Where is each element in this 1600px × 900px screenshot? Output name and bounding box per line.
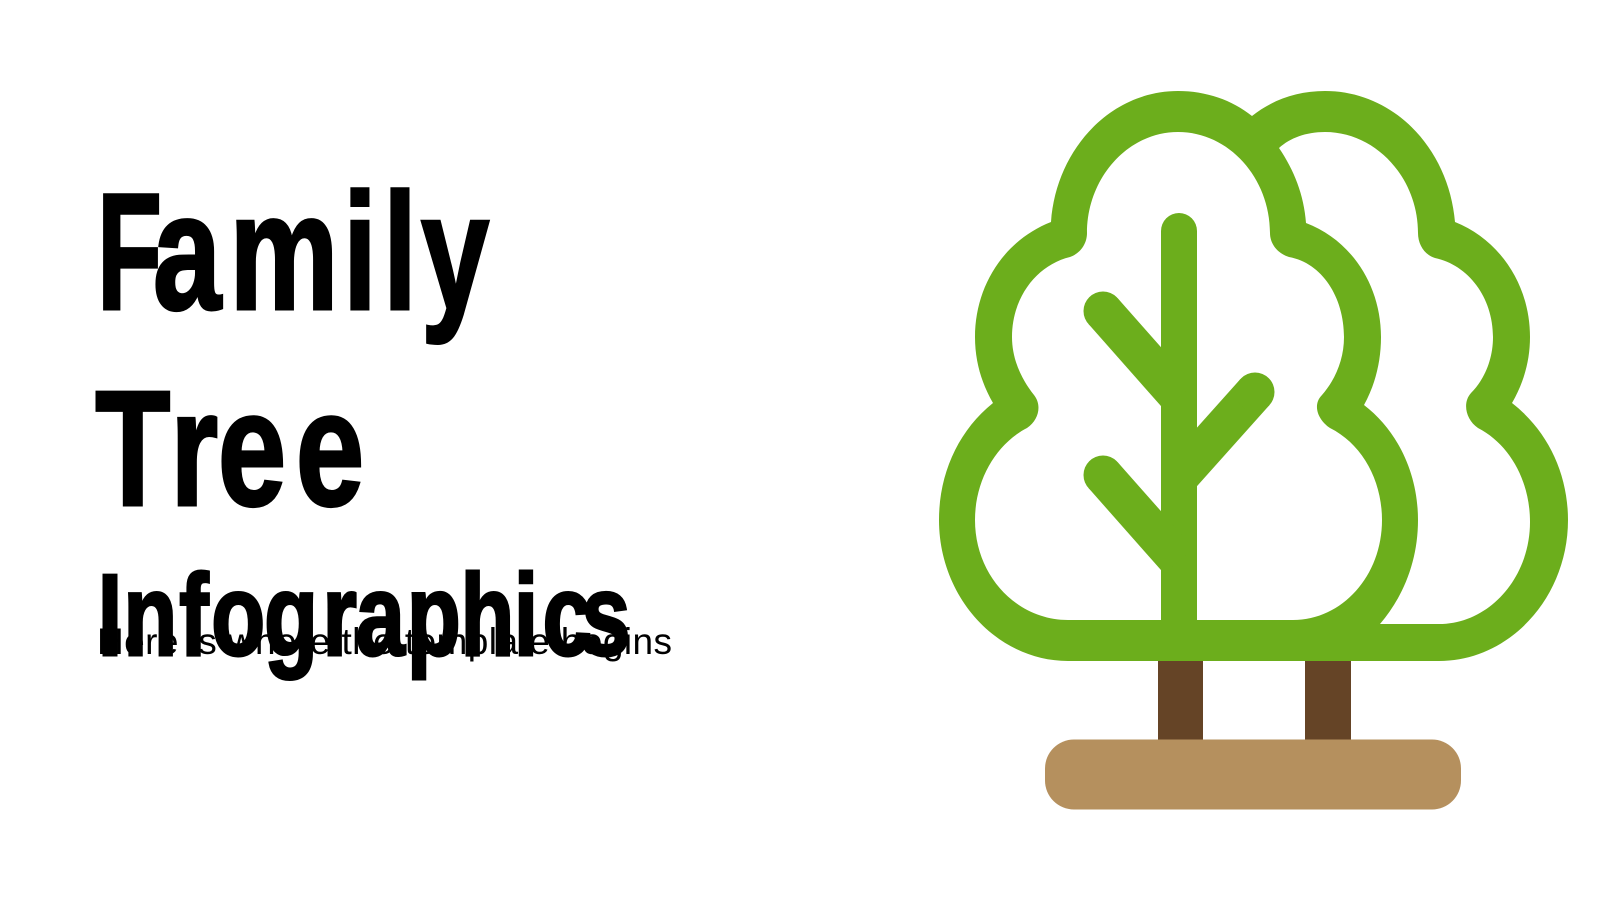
title line: Tree: Tree (95, 357, 364, 540)
subtitle: Here is where the template begins (97, 621, 672, 662)
tree trunks (1158, 655, 1351, 745)
title block (95, 159, 672, 680)
title line: Family: amily (153, 159, 489, 344)
ground soil (1045, 740, 1461, 810)
leaf veins (1084, 231, 1274, 630)
title line: Infographics: Infographics (98, 550, 630, 680)
icon: two trees (939, 91, 1568, 810)
title line: Family: F (97, 159, 162, 344)
tree crowns outline (939, 91, 1568, 661)
